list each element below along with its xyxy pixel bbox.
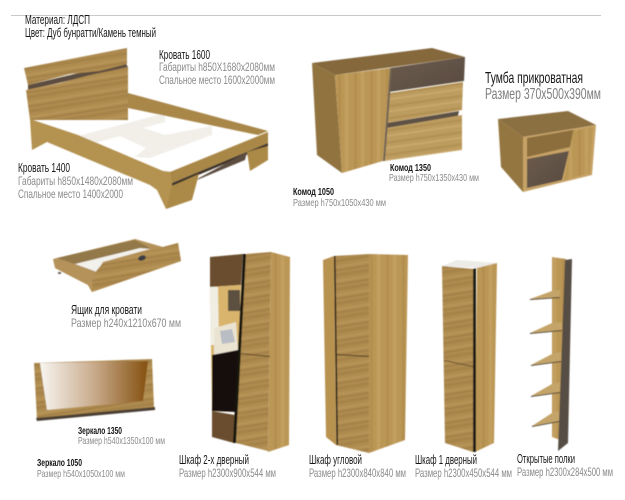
top rule [11,15,601,16]
label: bed 1400 [18,161,133,201]
label: one-door wardrobe [415,453,512,480]
bedside table illustration [498,111,596,192]
label: bed 1400: Кровать 1400 [18,161,70,175]
label: two-door wardrobe: Шкаф 2-х дверный [179,453,249,467]
label: bed drawer: Ящик для кровати [71,303,142,317]
label: open shelves [517,452,613,479]
label: chest 1050 [293,186,386,209]
label: open shelves: Открытые полки [517,452,575,466]
corner wardrobe illustration [323,254,408,453]
back side rail [128,93,268,135]
label: mirror 1050: Размер h540x1050x100 мм [37,468,125,480]
label: one-door wardrobe: Шкаф 1 дверный [415,453,477,467]
label: two-door wardrobe: Размер h2300x900x544 мм [179,466,276,480]
two-door wardrobe illustration [210,252,290,452]
label: one-door wardrobe: Размер h2300x450x544 мм [415,466,512,480]
label: bed 1600 [159,48,275,87]
label: mirror 1350: Размер h540x1350x100 мм [78,435,165,447]
left foot leg [166,174,199,209]
label: bed 1600: Габариты h850X1680x2080мм [159,60,275,74]
left side rail [30,119,172,209]
label: chest 1350: Размер h750x1350x430 мм [389,172,479,184]
mirror illustration [34,359,155,421]
label: bed 1600: Кровать 1600 [159,48,210,62]
right foot leg [247,146,268,171]
label: corner wardrobe [309,453,406,480]
headboard [24,48,128,120]
label: chest 1050: Размер h750x1050x430 мм [293,197,386,209]
material and colour note [25,13,156,40]
label: bed drawer: Размер h240x1210x670 мм [71,316,181,330]
label: corner wardrobe: Размер h2300x840x840 мм [309,466,406,480]
bed illustration [24,48,268,209]
label: bed drawer [71,303,181,330]
label: mirror 1350: Зеркало 1350 [78,425,122,437]
label: chest 1350 [389,162,479,184]
chest of drawers illustration [312,48,465,173]
bed drawer illustration [53,239,181,292]
white slats [78,113,212,158]
label: two-door wardrobe [179,453,276,480]
label: bed 1400: Спальное место 1400x2000 [18,187,123,201]
label: chest 1050: Комод 1050 [293,186,334,198]
label: bed 1600: Спальное место 1600x2000мм [159,73,275,87]
material and colour note: Цвет: Дуб бунратти/Камень темный [25,26,156,40]
open shelves illustration [530,257,572,451]
label: bedside table [485,70,601,103]
label: mirror 1350 [78,425,165,447]
material and colour note: Материал: ЛДСП [25,13,90,27]
label: mirror 1050: Зеркало 1050 [37,457,82,469]
label: bed 1400: Габариты h850x1480x2080мм [18,174,133,188]
label: chest 1350: Комод 1350 [390,162,431,174]
mirror door with reflected room [210,285,241,412]
one-door wardrobe illustration [442,260,497,452]
foot rail [170,132,268,183]
label: mirror 1050 [37,457,125,480]
label: corner wardrobe: Шкаф угловой [309,453,362,467]
